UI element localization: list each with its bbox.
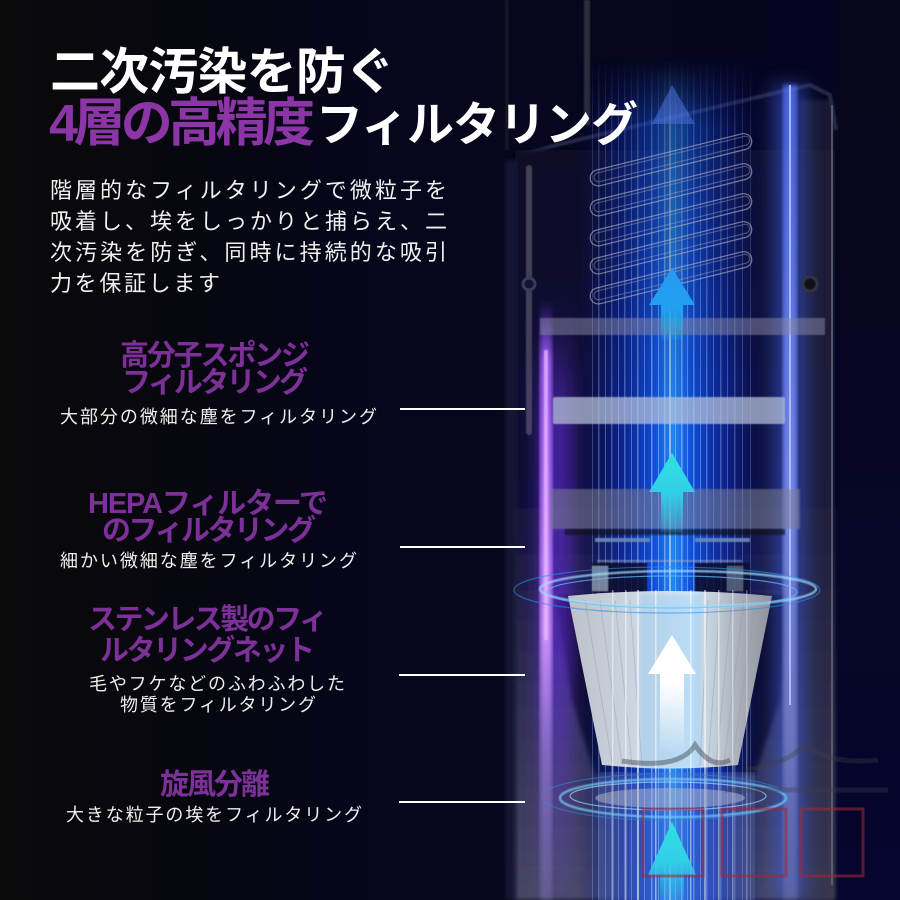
arrow 3 [649,453,695,532]
arrow 1 (top, faded) [652,85,695,124]
spiral coil [589,132,753,306]
mechanical parts [565,529,785,593]
vacuum illustration [505,0,888,900]
filter layer bands [540,318,825,529]
label: cyclone separation: 大きな粒子の埃をフィルタリング [66,805,362,825]
lower column glow [600,772,755,900]
leader line 1 [400,408,525,410]
screws [523,277,817,291]
arrow 2 [649,268,695,340]
swirl ring: upper [514,567,820,613]
label: sponge filter: 高分子スポンジ [120,339,310,372]
intro text: 吸着し、埃をしっかりと捕らえ、二 [50,209,447,234]
arrow 4 (white) [648,635,696,755]
label: HEPA filter: 細かい微細な塵をフィルタリング [60,551,357,571]
label: stainless net [88,603,345,715]
title: 4層の高精度 [49,95,315,153]
watermark [622,745,888,876]
label: stainless net: ルタリングネット [100,634,315,667]
arrow 5 [648,822,696,900]
title: フィルタリング [316,98,638,151]
purple light streak [538,300,574,900]
leader line 4 [399,801,525,803]
central air beam [578,60,768,900]
label: sponge filter: フィルタリング [122,366,308,399]
label: sponge filter [60,339,377,427]
label: stainless net: 毛やフケなどのふわふわした [89,674,345,694]
housing: upper neck [505,0,836,155]
housing: column body [515,150,835,900]
intro text [50,178,447,296]
intro text: 力を保証します [50,271,220,296]
intro text: 次汚染を防ぎ、同時に持続的な吸引 [50,240,447,265]
label: cyclone separation [66,768,362,825]
label: stainless net: 物質をフィルタリング [120,695,316,715]
blue light streak [772,85,806,900]
pleated cone filter [568,590,772,900]
label: HEPA filter: HEPAフィルターで [88,487,328,520]
label: stainless net: ステンレス製のフィ [88,603,328,636]
leader line 2 [400,546,525,548]
intro text: 階層的なフィルタリングで微粒子を [50,178,447,203]
swirl ring: lower [542,774,788,820]
dark recess around cone [555,595,790,775]
label: HEPA filter: のフィルタリング [102,514,316,547]
title: 二次汚染を防ぐ [50,44,395,100]
leader line 3 [399,674,525,676]
label: cyclone separation: 旋風分離 [160,768,270,801]
label: sponge filter: 大部分の微細な塵をフィルタリング [60,407,377,427]
label: HEPA filter [60,487,357,571]
title [49,44,638,153]
